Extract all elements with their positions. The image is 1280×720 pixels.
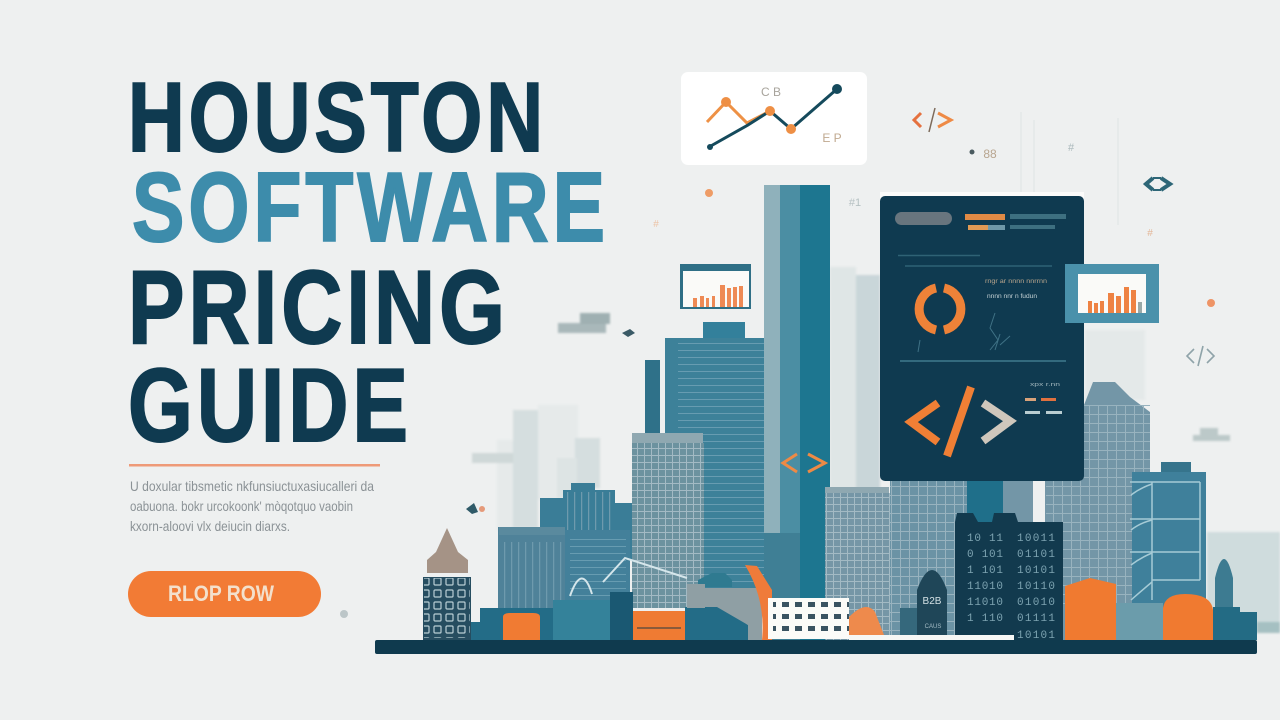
ring caption text: rngr ar nnnn nnrrnn — [985, 279, 1047, 285]
dark line series — [709, 89, 837, 147]
bars — [693, 285, 743, 307]
large code symbol — [911, 387, 1010, 456]
body text: U doxular tibsmetic nkfunsiuctuxasiucalleri da — [130, 478, 374, 494]
panel header bars — [965, 214, 1066, 230]
dark binary building: 11010 — [967, 597, 1003, 609]
icon: orange code tag — [914, 108, 951, 132]
glass frame tower — [1130, 462, 1206, 640]
panel divider — [900, 360, 1066, 362]
stepped blue block — [540, 483, 632, 560]
low dark block far right — [1213, 607, 1257, 640]
grid buildings behind the panel — [825, 382, 1150, 640]
grey low blocks — [687, 584, 762, 640]
body text: kxorn-aloovi vlx deiucin diarxs. — [130, 518, 290, 534]
dark domed building: CAUS — [925, 624, 941, 630]
monitor chart left — [680, 264, 751, 309]
narrow dark tower — [645, 360, 660, 434]
code caption text — [1025, 382, 1062, 414]
icon: dark code tag — [1146, 178, 1170, 190]
scattered small icons: # — [653, 219, 659, 230]
ground bar — [375, 640, 1257, 654]
dark binary building: 01010 — [1017, 597, 1055, 609]
dark binary building: 01111 — [1017, 613, 1055, 625]
dark binary building — [955, 513, 1063, 642]
title line: PRICING: PRICING — [128, 250, 509, 366]
chart labels: C B — [761, 85, 781, 99]
panel header pill — [895, 212, 952, 225]
scattered small icons — [466, 142, 1215, 514]
white window building — [768, 598, 849, 639]
white crane line — [570, 558, 687, 596]
body text: oabuona. bokr urcokoonk' mòqotquo vaobin — [130, 498, 353, 514]
white ground strip — [849, 635, 1014, 640]
teal small dome — [698, 573, 732, 587]
orange line series — [707, 102, 770, 123]
orange small mound — [849, 607, 884, 635]
dark code panel — [880, 192, 1084, 481]
orange right buildings — [1065, 578, 1213, 640]
grey grid tower — [632, 433, 704, 608]
scattered small icons: # — [1068, 142, 1075, 154]
low teal foreground blocks — [471, 592, 748, 640]
dark binary building: 1 110 — [967, 613, 1003, 625]
chart labels — [761, 85, 842, 145]
dark domed building — [917, 570, 947, 635]
scattered small icons: 88 — [983, 147, 997, 161]
dark binary building: 01101 — [1017, 549, 1055, 561]
tall rooftop tower — [764, 185, 830, 640]
ring caption text: nnnn nnr n fudun — [987, 294, 1037, 300]
dark binary building: 10101 — [1017, 565, 1055, 577]
orange low building centre — [633, 611, 685, 640]
bars — [1088, 287, 1142, 313]
orange low building left — [503, 613, 540, 640]
spired window building — [423, 528, 471, 640]
skyline — [423, 185, 1257, 642]
dark binary building: 10011 — [1017, 533, 1055, 545]
dark binary building: 1 101 — [967, 565, 1003, 577]
icon: code brackets on tower — [783, 454, 825, 472]
dark binary building: 10101 — [1017, 630, 1055, 642]
dark binary building: 11010 — [967, 581, 1003, 593]
dark binary building: 0 101 — [967, 549, 1003, 561]
orange divider — [129, 464, 380, 466]
monitor chart right — [1065, 264, 1159, 323]
button: RLOP ROW — [168, 581, 274, 606]
low teal block right — [1116, 603, 1163, 640]
code caption text: xpx r.nn — [1030, 382, 1060, 388]
body text — [130, 478, 374, 534]
faint vertical guide lines — [1021, 112, 1118, 225]
ring caption text — [985, 279, 1047, 300]
scattered small icons: #1 — [849, 197, 861, 209]
faint distant skyline — [472, 267, 1280, 633]
chart points — [707, 84, 842, 150]
small dark block — [900, 608, 917, 635]
dark domed building: B2B — [923, 596, 942, 607]
title line: GUIDE: GUIDE — [128, 348, 412, 464]
dark binary building: 10110 — [1017, 581, 1055, 593]
title — [128, 62, 609, 464]
striped mid tower — [665, 322, 764, 603]
orange ring chart — [919, 288, 961, 330]
scattered small icons: # — [1147, 228, 1153, 239]
dark striped block — [498, 527, 630, 612]
line chart card — [681, 72, 867, 165]
faint sketch marks — [918, 313, 1010, 352]
small icon near button — [340, 610, 348, 618]
button — [128, 571, 321, 617]
icon: grey code tag — [1187, 346, 1214, 366]
title line: SOFTWARE: SOFTWARE — [132, 152, 609, 262]
panel section lines — [898, 256, 1052, 266]
orange accent wedge — [745, 565, 772, 640]
far-right small tower — [1215, 559, 1233, 640]
dark binary building: 10 11 — [967, 533, 1003, 545]
title line: HOUSTON: HOUSTON — [128, 62, 547, 172]
chart labels: E P — [822, 131, 842, 145]
